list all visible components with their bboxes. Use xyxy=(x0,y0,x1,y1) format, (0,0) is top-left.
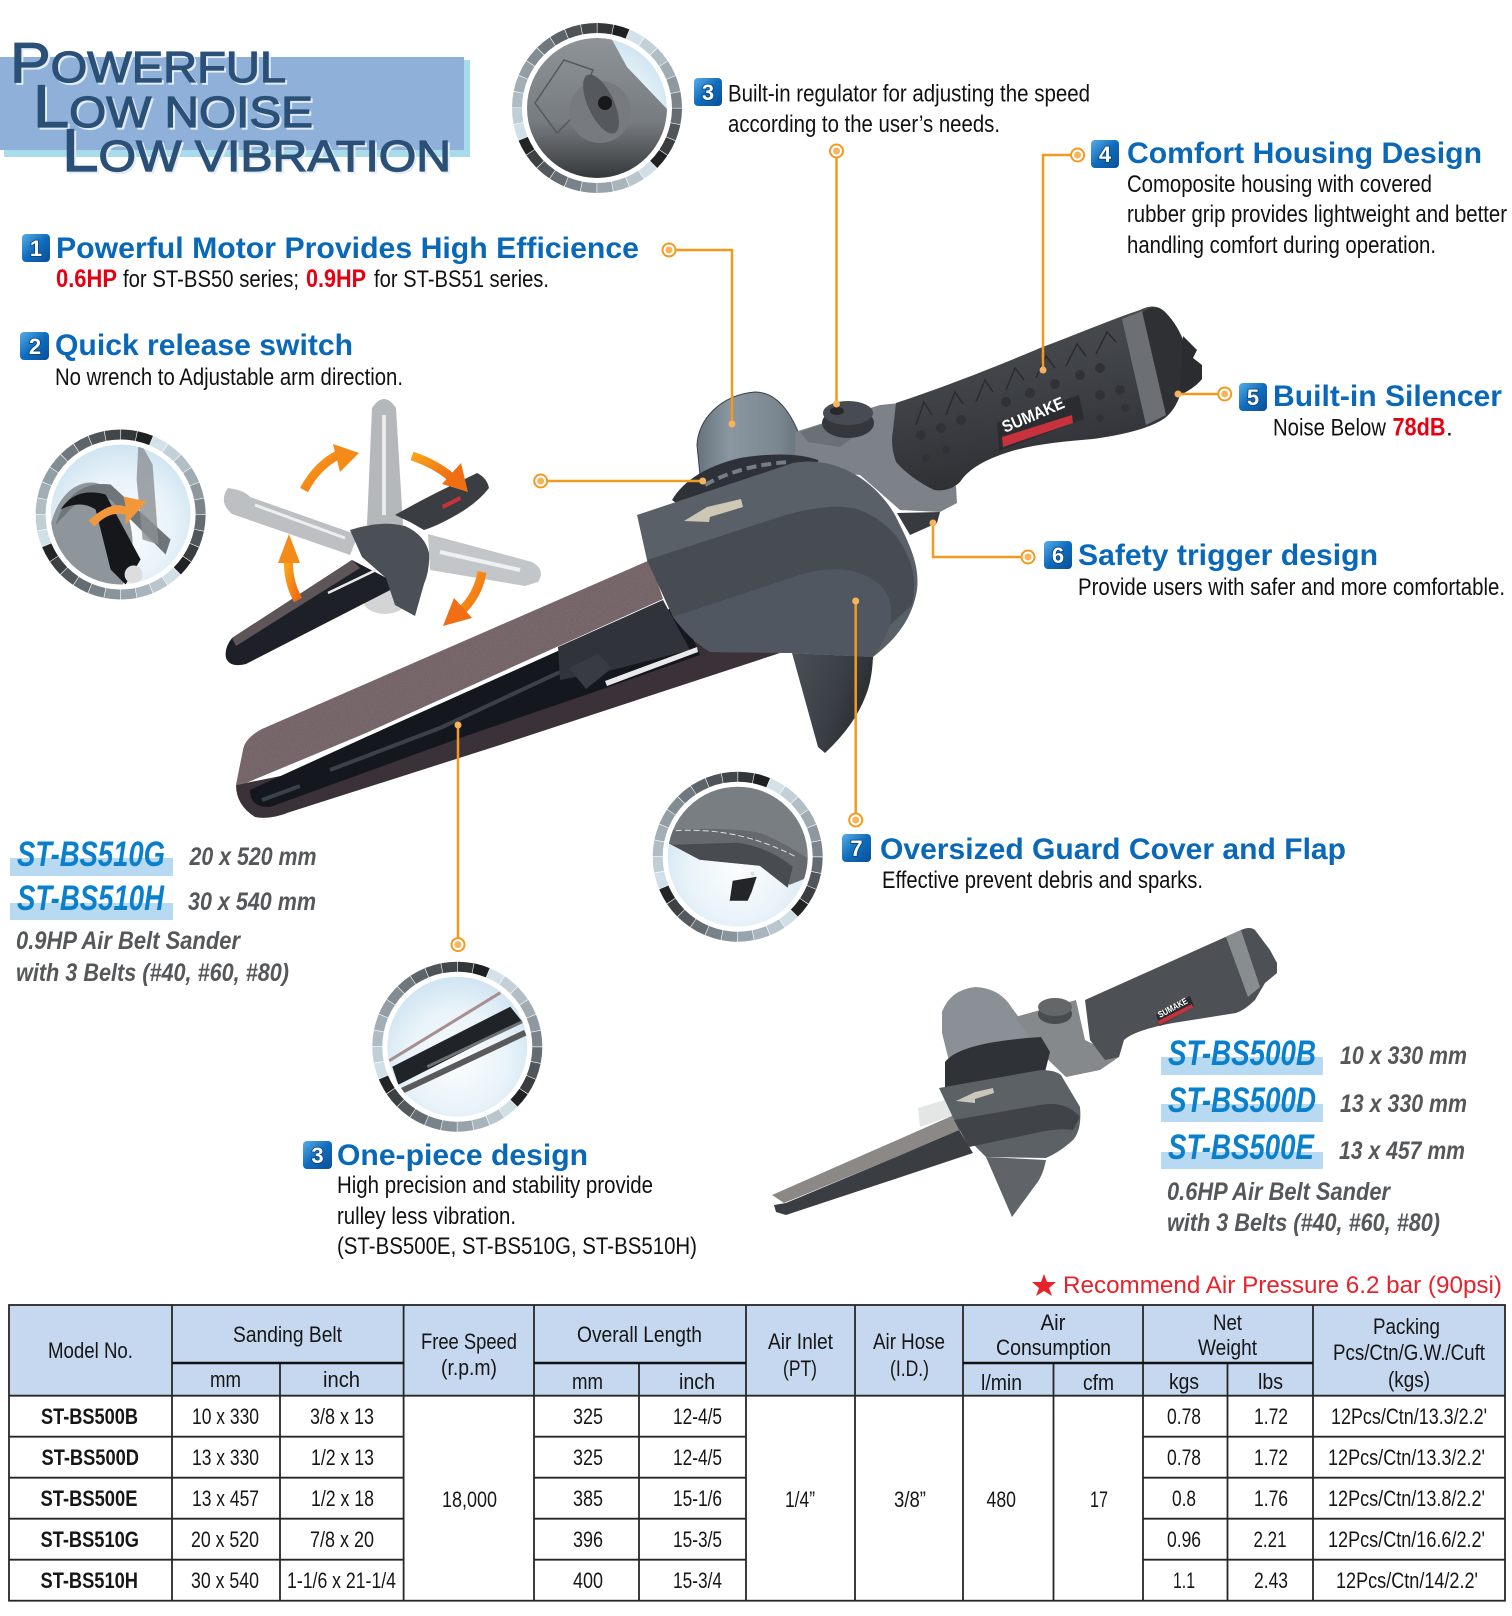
sub-header rules xyxy=(172,1362,1313,1364)
table row ST-BS500E: 15-1/6 xyxy=(673,1486,722,1511)
sanding belt top surface xyxy=(236,560,663,785)
feature 4: housing: Comoposite housing with covered xyxy=(1127,171,1432,198)
arm belt edge xyxy=(232,560,360,646)
recommended air pressure note: Recommend Air Pressure 6.2 bar (90psi) xyxy=(1063,1272,1502,1299)
rubber grip handle xyxy=(892,306,1185,490)
title text: POWERFUL xyxy=(10,31,286,95)
small guard xyxy=(350,524,429,616)
models block: 0.6HP: ST-BS500E xyxy=(1168,1128,1315,1167)
table row ST-BS500E: ST-BS500E xyxy=(40,1486,138,1511)
models block: 0.9HP: with 3 Belts (#40, #60, #80) xyxy=(16,959,289,987)
brand label: SUMAKE xyxy=(1156,996,1189,1020)
feature 3: regulator: 3 xyxy=(702,80,714,105)
table row ST-BS510H: 2.43 xyxy=(1254,1568,1288,1593)
feature 6: trigger: 6 xyxy=(1052,543,1064,568)
feature 1: motor: for ST-BS50 series; xyxy=(123,266,299,293)
table row ST-BS510G: 15-3/5 xyxy=(673,1527,722,1552)
models block: 0.6HP: 13 x 457 mm xyxy=(1339,1137,1465,1165)
neck xyxy=(1015,1000,1119,1077)
table header text: Pcs/Ctn/G.W./Cuft xyxy=(1333,1340,1485,1365)
grip dots xyxy=(916,363,1129,462)
merged table values: 18,000 xyxy=(442,1487,497,1512)
title banner xyxy=(0,31,470,184)
models block: 0.9HP: 0.9HP Air Belt Sander xyxy=(16,927,241,955)
support disc xyxy=(363,586,407,614)
table row ST-BS500D: 0.78 xyxy=(1167,1445,1201,1470)
bearing ring xyxy=(945,1037,1050,1092)
table grid xyxy=(9,1305,1505,1601)
ghost arm left xyxy=(224,488,358,555)
table header text: inch xyxy=(323,1367,360,1392)
table header text: Packing xyxy=(1373,1314,1440,1339)
feature 8: one-piece: rulley less vibration. xyxy=(337,1203,516,1230)
table row ST-BS510H: 30 x 540 xyxy=(191,1568,259,1593)
brand label xyxy=(1156,996,1194,1026)
table row ST-BS510G: 0.96 xyxy=(1167,1527,1201,1552)
feature 1: motor: 0.6HP xyxy=(56,265,117,293)
table row ST-BS510H: 400 xyxy=(573,1568,603,1593)
feature 7: guard: Effective prevent debris and sparks. xyxy=(882,867,1203,894)
orange arrow D xyxy=(443,572,482,626)
table header text: cfm xyxy=(1083,1370,1114,1395)
rotation illustration xyxy=(224,399,541,665)
guard xyxy=(939,1070,1080,1158)
table header text: mm xyxy=(572,1369,603,1394)
ghost arm right xyxy=(428,534,541,586)
black arm xyxy=(250,605,700,807)
table row ST-BS500E: 1/2 x 18 xyxy=(311,1486,374,1511)
feature 6: trigger xyxy=(1044,539,1505,601)
mount block xyxy=(558,600,690,680)
feature 5: silencer: . xyxy=(1446,414,1453,442)
title text: LOW VIBRATION xyxy=(62,117,451,184)
table header text: (PT) xyxy=(783,1356,817,1381)
black arm xyxy=(392,1007,522,1085)
feature 3: regulator xyxy=(694,78,1090,138)
table row ST-BS500D: ST-BS500D xyxy=(42,1445,139,1470)
handle xyxy=(1085,928,1277,1060)
feature 1: motor xyxy=(22,232,639,293)
handle end cap xyxy=(1142,307,1185,415)
feature 5: silencer xyxy=(1239,380,1502,442)
table header text: Net xyxy=(1213,1310,1242,1335)
detail circle: guard xyxy=(652,772,823,942)
table row ST-BS510G: 2.21 xyxy=(1254,1527,1286,1552)
tool arm xyxy=(226,560,400,665)
callout lines xyxy=(458,155,1220,939)
table header text: (kgs) xyxy=(1388,1367,1430,1392)
detail circle: quick release xyxy=(36,430,206,600)
feature 8: one-piece: High precision and stability provide xyxy=(337,1172,653,1199)
table row ST-BS510H: 12Pcs/Ctn/14/2.2' xyxy=(1336,1568,1478,1593)
models block: 0.6HP: 10 x 330 mm xyxy=(1340,1042,1467,1070)
handle end band xyxy=(1122,311,1166,425)
feature 1: motor: 0.9HP xyxy=(306,265,366,293)
table row ST-BS500B: 325 xyxy=(573,1404,603,1429)
tool handle xyxy=(395,473,489,530)
feature 8: one-piece: One-piece design xyxy=(337,1139,588,1172)
arm xyxy=(774,1130,973,1215)
table row ST-BS510G: ST-BS510G xyxy=(40,1527,139,1552)
merged table values xyxy=(442,1487,1108,1512)
table header background xyxy=(9,1305,1505,1396)
brand label: SUMAKE xyxy=(999,393,1067,437)
feature 4: housing: handling comfort during operation. xyxy=(1127,232,1436,259)
table row ST-BS510G xyxy=(40,1527,1485,1552)
merged table values: 17 xyxy=(1090,1487,1108,1512)
models block: 0.9HP: ST-BS510H xyxy=(17,879,165,918)
motor housing xyxy=(697,392,806,475)
table row ST-BS500E: 0.8 xyxy=(1172,1486,1196,1511)
table row ST-BS500B xyxy=(41,1404,1487,1429)
table row ST-BS500D xyxy=(42,1445,1485,1470)
table header text xyxy=(48,1310,1485,1395)
table header text: Weight xyxy=(1198,1335,1257,1360)
table row ST-BS510H xyxy=(40,1568,1478,1593)
table row ST-BS500E: 13 x 457 xyxy=(192,1486,259,1511)
main belt sander illustration xyxy=(236,306,1202,818)
table row ST-BS500D: 12-4/5 xyxy=(673,1445,722,1470)
table row ST-BS500E xyxy=(40,1486,1485,1511)
table row ST-BS510H: 1-1/6 x 21-1/4 xyxy=(287,1568,396,1593)
feature 8: one-piece: 3 xyxy=(311,1143,324,1168)
bearing ring xyxy=(672,454,820,520)
black strap xyxy=(61,492,141,584)
feature 5: silencer: Noise Below xyxy=(1273,414,1386,442)
table row ST-BS500B: 12-4/5 xyxy=(673,1404,722,1429)
table row ST-BS510G: 7/8 x 20 xyxy=(310,1527,374,1552)
feature 8: one-piece: (ST-BS500E, ST-BS510G, ST-BS510H) xyxy=(337,1233,697,1260)
models block: 0.9HP xyxy=(10,835,316,987)
title text: LOW NOISE xyxy=(33,73,313,140)
detail circle: one-piece arm xyxy=(372,962,542,1132)
models block: 0.6HP: ST-BS500D xyxy=(1168,1081,1316,1120)
lower belt xyxy=(236,640,780,818)
table header text: Air Hose xyxy=(873,1329,945,1354)
feature 1: motor: 1 xyxy=(30,236,42,261)
feature 2: quick release xyxy=(20,329,403,391)
table row ST-BS500B: 10 x 330 xyxy=(192,1404,259,1429)
callout targets xyxy=(452,144,1231,951)
table row ST-BS500E: 1.76 xyxy=(1254,1486,1288,1511)
orange arrow A xyxy=(304,444,359,490)
table row ST-BS510G: 20 x 520 xyxy=(191,1527,259,1552)
models block: 0.6HP: 0.6HP Air Belt Sander xyxy=(1167,1178,1391,1206)
motor xyxy=(942,987,1041,1065)
tool neck xyxy=(795,403,957,512)
guard arrow xyxy=(684,499,743,522)
feature 5: silencer: 78dB xyxy=(1392,414,1446,442)
feature 5: silencer: Built-in Silencer xyxy=(1273,380,1502,413)
table row ST-BS500D: 325 xyxy=(573,1445,603,1470)
clear lever xyxy=(137,440,159,544)
clamp piece xyxy=(569,654,612,689)
feature 2: quick release: No wrench to Adjustable arm direction. xyxy=(55,364,403,391)
feature 5: silencer: 5 xyxy=(1247,385,1259,410)
white metal plate xyxy=(605,647,698,686)
feature 2: quick release: Quick release switch xyxy=(55,329,353,362)
feature 1: motor: Powerful Motor Provides High Efficience xyxy=(56,232,639,265)
models block: 0.6HP: with 3 Belts (#40, #60, #80) xyxy=(1167,1209,1440,1237)
merged table values: 3/8” xyxy=(894,1487,926,1512)
table row ST-BS510H: 1.1 xyxy=(1173,1568,1195,1593)
guard cover xyxy=(637,462,918,657)
table row ST-BS500D: 1.72 xyxy=(1254,1445,1288,1470)
guard band xyxy=(954,1104,1080,1147)
feature 4: housing: Comfort Housing Design xyxy=(1127,137,1482,170)
grip texture xyxy=(916,332,1116,425)
arm slit xyxy=(328,570,376,593)
models block: 0.6HP: 13 x 330 mm xyxy=(1340,1090,1467,1118)
guard flap xyxy=(792,653,873,753)
feature 6: trigger: Safety trigger design xyxy=(1078,539,1378,572)
flap tip xyxy=(730,877,757,901)
small belt sander illustration xyxy=(772,928,1277,1217)
feature 7: guard xyxy=(842,833,1346,894)
merged table values: 480 xyxy=(986,1487,1016,1512)
models block: 0.9HP: 20 x 520 mm xyxy=(189,843,316,871)
orange arrow B xyxy=(412,456,468,492)
feature 2: quick release: 2 xyxy=(29,334,41,359)
regulator panel xyxy=(535,60,593,133)
pale plate xyxy=(918,1097,954,1127)
table header text: Free Speed xyxy=(421,1329,517,1354)
models block: 0.9HP: ST-BS510G xyxy=(17,835,165,874)
guard arrow xyxy=(956,1088,994,1103)
merged table values: 1/4” xyxy=(785,1487,815,1512)
detail circle: regulator xyxy=(512,23,682,193)
table row ST-BS500B: ST-BS500B xyxy=(41,1404,138,1429)
table row ST-BS500B: 0.78 xyxy=(1167,1404,1201,1429)
belt xyxy=(772,1115,959,1203)
table header text: mm xyxy=(210,1367,241,1392)
handle band xyxy=(1226,930,1260,997)
feature 3: regulator: Built-in regulator for adjusting the speed xyxy=(728,80,1090,108)
table header text: Sanding Belt xyxy=(233,1322,342,1347)
table row ST-BS510G: 396 xyxy=(573,1527,603,1552)
feature 1: motor: for ST-BS51 series. xyxy=(374,266,549,293)
feature 4: housing: 4 xyxy=(1099,142,1112,167)
table row ST-BS500B: 1.72 xyxy=(1254,1404,1288,1429)
table header text: Overall Length xyxy=(577,1322,702,1347)
brand label xyxy=(997,393,1084,451)
table row ST-BS500D: 13 x 330 xyxy=(192,1445,259,1470)
specification table xyxy=(9,1305,1505,1601)
ghost arm top xyxy=(367,399,403,525)
regulator knob xyxy=(800,401,874,447)
table header text: Air Inlet xyxy=(768,1329,833,1354)
knob xyxy=(1038,998,1072,1024)
table header text: kgs xyxy=(1169,1369,1199,1394)
trigger xyxy=(897,512,940,535)
table header text: lbs xyxy=(1258,1369,1283,1394)
models block: 0.6HP xyxy=(1161,1034,1467,1237)
feature 7: guard: 7 xyxy=(850,836,863,861)
arm highlight xyxy=(262,672,560,800)
feature 3: regulator: according to the user’s needs. xyxy=(728,111,1000,138)
table row ST-BS510H: 15-3/4 xyxy=(673,1568,722,1593)
flap xyxy=(986,1157,1046,1217)
exhaust silencer xyxy=(1180,336,1202,395)
table row ST-BS510H: ST-BS510H xyxy=(40,1568,138,1593)
feature 7: guard: Oversized Guard Cover and Flap xyxy=(880,833,1346,866)
table header text: Consumption xyxy=(996,1335,1111,1360)
table row ST-BS500B: 3/8 x 13 xyxy=(310,1404,374,1429)
orange arrow xyxy=(89,496,147,526)
models block: 0.6HP: ST-BS500B xyxy=(1168,1034,1316,1073)
table header text: inch xyxy=(679,1369,715,1394)
red label xyxy=(442,496,461,509)
feature 4: housing xyxy=(1091,137,1507,259)
title text xyxy=(10,31,451,184)
table row ST-BS500E: 385 xyxy=(573,1486,603,1511)
models block: 0.9HP: 30 x 540 mm xyxy=(188,888,316,916)
feature 8: one-piece xyxy=(303,1139,697,1260)
orange arrow C xyxy=(278,534,300,600)
knob xyxy=(569,81,631,143)
table header text: Model No. xyxy=(48,1338,133,1363)
table row ST-BS500D: 1/2 x 13 xyxy=(311,1445,374,1470)
table header text: (r.p.m) xyxy=(441,1355,497,1380)
table header text: l/min xyxy=(981,1370,1022,1395)
table header text: Air xyxy=(1040,1310,1066,1335)
table header text: (I.D.) xyxy=(890,1356,929,1381)
